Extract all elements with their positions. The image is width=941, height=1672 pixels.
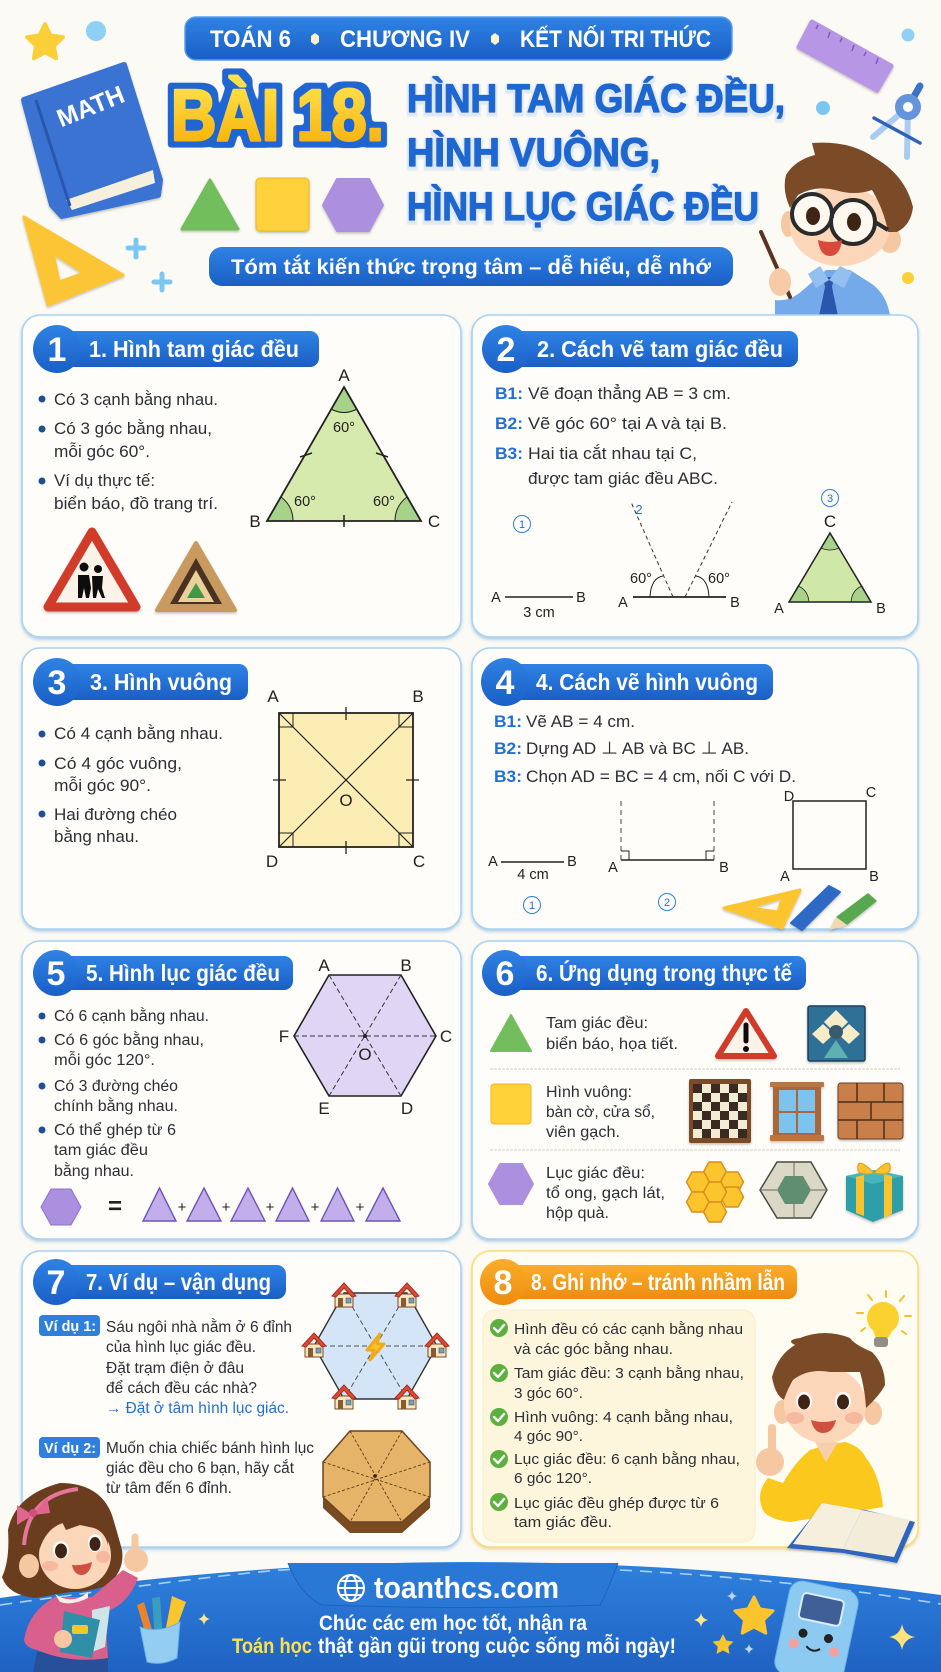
heading 6 bbox=[482, 950, 806, 996]
checklist: Hình vuông: 4 cạnh bằng nhau, bbox=[514, 1409, 733, 1426]
heading 6: 6. Ứng dụng trong thực tế bbox=[536, 959, 792, 986]
diagram step 3: C bbox=[824, 512, 836, 531]
diagram step 1: A bbox=[488, 854, 498, 870]
diagram step 1: 4 cm bbox=[517, 867, 549, 883]
diagram step 2: A bbox=[618, 595, 628, 611]
header bbox=[24, 17, 920, 316]
bullet list: Có 4 góc vuông, bbox=[54, 755, 182, 773]
square diagram ABCD: B bbox=[412, 687, 424, 706]
bullet list: Có 6 cạnh bằng nhau. bbox=[54, 1008, 209, 1025]
example 2: giác đều cho 6 bạn, hãy cắt bbox=[106, 1460, 295, 1477]
diagram step 1 bbox=[491, 516, 586, 621]
closing message: Chúc các em học tốt, nhận ra bbox=[319, 1612, 587, 1635]
bullet list bbox=[38, 390, 218, 513]
checklist: Lục giác đều: 6 cạnh bằng nhau, bbox=[514, 1451, 740, 1468]
icon: chess board bbox=[689, 1079, 751, 1143]
checklist: Lục giác đều ghép được từ 6 bbox=[514, 1495, 719, 1512]
bullet list: bằng nhau. bbox=[54, 1163, 134, 1180]
row: hexagon uses: tổ ong, gạch lát, bbox=[546, 1185, 665, 1202]
diagram step 2: 60° bbox=[630, 571, 652, 587]
icon: warning sign bbox=[718, 1011, 774, 1056]
panel 3: square bbox=[22, 648, 461, 929]
diagram step 3: B bbox=[869, 869, 879, 885]
icon: calculator bbox=[772, 1579, 861, 1672]
bullet list: Có 3 góc bằng nhau, bbox=[54, 419, 212, 438]
character: boy in yellow hoodie bbox=[756, 1333, 885, 1522]
icon: gift box bbox=[846, 1163, 903, 1222]
icon: math book: MATH bbox=[53, 81, 129, 133]
checklist: 6 góc 120°. bbox=[514, 1470, 592, 1487]
icon: school warning sign bbox=[48, 532, 136, 607]
diagram step 1: 1 bbox=[519, 519, 525, 531]
main title bbox=[407, 75, 785, 229]
steps: B3: bbox=[495, 445, 523, 463]
triangle diagram ABC: 60° bbox=[333, 420, 355, 436]
icon: honeycomb bbox=[686, 1162, 744, 1222]
checklist bbox=[483, 1310, 755, 1542]
square diagram ABCD: O bbox=[339, 791, 353, 810]
icon: ruler bbox=[799, 22, 891, 90]
bullet list: Có thể ghép từ 6 bbox=[54, 1122, 176, 1139]
panel 4: how to draw square bbox=[472, 648, 918, 930]
diagram step 1: B bbox=[576, 590, 586, 606]
heading 1: 1. Hình tam giác đều bbox=[89, 336, 299, 362]
diagram step 2 bbox=[618, 502, 740, 611]
steps: Vẽ góc 60° tại A và tại B. bbox=[528, 415, 727, 433]
diagram step 2: B bbox=[730, 595, 740, 611]
diagram step 1: 1 bbox=[529, 900, 535, 912]
heading 3: 3 bbox=[48, 664, 66, 702]
diagram step 3 bbox=[780, 785, 879, 885]
diagram step 3: D bbox=[784, 789, 794, 805]
decorative dots and plus signs bbox=[86, 21, 914, 290]
icon: globe bbox=[338, 1575, 364, 1601]
icon: compass bbox=[873, 86, 920, 157]
heading 7: 7. Ví dụ – vận dụng bbox=[86, 1269, 271, 1295]
example 1: để cách đều các nhà? bbox=[106, 1380, 257, 1397]
checklist: 4 góc 90°. bbox=[514, 1428, 583, 1445]
heading 3: 3. Hình vuông bbox=[90, 669, 232, 695]
triangle diagram ABC bbox=[249, 366, 440, 531]
bullet list: Ví dụ thực tế: bbox=[54, 472, 155, 490]
row: hexagon uses bbox=[489, 1162, 903, 1222]
icon: bricks bbox=[838, 1083, 903, 1139]
row: hexagon uses: hộp quà. bbox=[546, 1205, 609, 1222]
icon: open book bbox=[787, 1503, 915, 1563]
example 1: Đặt trạm điện ở đâu bbox=[106, 1360, 244, 1377]
hexagon equals six triangles: = bbox=[108, 1193, 122, 1220]
heading 7 bbox=[33, 1259, 286, 1305]
heading 4: 4 bbox=[496, 664, 515, 702]
hexagon diagram: O bbox=[358, 1045, 372, 1064]
example 1: → Đặt ở tâm hình lục giác. bbox=[106, 1400, 289, 1417]
heading 8: 8 bbox=[494, 1264, 512, 1302]
bullet list: Hai đường chéo bbox=[54, 806, 177, 824]
hexagon diagram: E bbox=[318, 1099, 330, 1118]
bullet list: mỗi góc 60°. bbox=[54, 442, 150, 461]
main title: HÌNH LỤC GIÁC ĐỀU bbox=[407, 183, 759, 229]
icon: wooden triangle ornament bbox=[157, 543, 235, 610]
heading 5 bbox=[33, 950, 293, 996]
steps: B2: bbox=[494, 740, 522, 758]
steps: Dựng AD ⊥ AB và BC ⊥ AB. bbox=[526, 740, 749, 758]
closing message: thật gần gũi trong cuộc sống mỗi ngày! bbox=[318, 1634, 676, 1658]
diagram step 2: 2 bbox=[635, 502, 643, 517]
diagram step 1: B bbox=[567, 854, 577, 870]
diagram step 1: 3 cm bbox=[523, 605, 555, 621]
subtitle pill bbox=[209, 247, 733, 286]
bullet list: biển báo, đồ trang trí. bbox=[54, 495, 218, 513]
row: square uses: Hình vuông: bbox=[546, 1084, 632, 1101]
triangle diagram ABC: A bbox=[338, 366, 350, 385]
diagram step 3: 3 bbox=[827, 493, 833, 505]
row: triangle uses: biển báo, họa tiết. bbox=[546, 1036, 678, 1053]
example 1: Sáu ngôi nhà nằm ở 6 đỉnh bbox=[106, 1319, 292, 1336]
steps: Chọn AD = BC = 4 cm, nối C với D. bbox=[526, 768, 796, 786]
diagram step 3: A bbox=[774, 601, 784, 617]
hexagon diagram: C bbox=[440, 1027, 452, 1046]
heading 3 bbox=[33, 658, 248, 706]
diagram step 3: C bbox=[866, 785, 876, 801]
heading 2: 2 bbox=[497, 331, 515, 369]
bullet list: bằng nhau. bbox=[54, 827, 139, 846]
bullet list: mỗi góc 120°. bbox=[54, 1052, 155, 1069]
closing message bbox=[232, 1612, 676, 1658]
steps: B3: bbox=[494, 768, 522, 786]
square diagram ABCD bbox=[266, 687, 425, 871]
diagram step 2 bbox=[608, 799, 729, 910]
hexagon equals six triangles: + bbox=[178, 1199, 187, 1216]
diagram step 1: A bbox=[491, 590, 501, 606]
heading 8: 8. Ghi nhớ – tránh nhầm lẫn bbox=[531, 1268, 785, 1295]
bullet list: chính bằng nhau. bbox=[54, 1098, 178, 1115]
example 2 bbox=[39, 1437, 314, 1497]
hexagon equals six triangles: + bbox=[222, 1199, 231, 1216]
bullet list bbox=[38, 724, 223, 846]
main title: HÌNH VUÔNG, bbox=[407, 129, 660, 175]
example 2: Ví dụ 2: bbox=[44, 1440, 96, 1457]
panel 5: regular hexagon bbox=[22, 941, 461, 1239]
hexagon with houses bbox=[302, 1283, 449, 1409]
bullet list: Có 4 cạnh bằng nhau. bbox=[54, 724, 223, 743]
heading 1 bbox=[33, 325, 319, 373]
triangle diagram ABC: 60° bbox=[294, 494, 316, 510]
hexagon equals six triangles bbox=[41, 1188, 400, 1225]
steps bbox=[494, 713, 796, 786]
heading 8 bbox=[480, 1259, 797, 1305]
square diagram ABCD: D bbox=[266, 852, 278, 871]
icon: star bbox=[27, 24, 63, 58]
bullet list: Có 3 đường chéo bbox=[54, 1078, 178, 1095]
row: hexagon uses: Lục giác đều: bbox=[546, 1165, 645, 1182]
heading 2: 2. Cách vẽ tam giác đều bbox=[537, 336, 783, 362]
character: girl with book bbox=[2, 1483, 148, 1672]
diagram step 3 bbox=[774, 490, 886, 617]
icon: pencil cup bbox=[137, 1596, 186, 1663]
steps: Vẽ AB = 4 cm. bbox=[526, 713, 635, 731]
example 1: của hình lục giác đều. bbox=[106, 1339, 256, 1356]
example 2: Muốn chia chiếc bánh hình lục bbox=[106, 1440, 314, 1457]
steps: B1: bbox=[495, 385, 523, 403]
panel 2: how to draw equilateral triangle bbox=[472, 315, 918, 637]
triangle diagram ABC: 60° bbox=[373, 494, 395, 510]
heading 1: 1 bbox=[48, 331, 66, 369]
heading 7: 7 bbox=[47, 1264, 65, 1302]
diagram step 3: B bbox=[876, 601, 886, 617]
bullet list bbox=[38, 1008, 209, 1180]
bullet list: Có 6 góc bằng nhau, bbox=[54, 1032, 204, 1049]
square diagram ABCD: C bbox=[413, 852, 425, 871]
panel 1: equilateral triangle bbox=[22, 315, 461, 637]
top pill: course info: KẾT NỐI TRI THỨC bbox=[520, 25, 711, 53]
checklist: và các góc bằng nhau. bbox=[514, 1341, 673, 1358]
heading 4 bbox=[481, 658, 773, 706]
checklist: tam giác đều. bbox=[514, 1514, 612, 1531]
hexagon equals six triangles: + bbox=[311, 1199, 320, 1216]
checklist: Hình đều có các cạnh bằng nhau bbox=[514, 1321, 743, 1338]
example 1: Ví dụ 1: bbox=[44, 1318, 96, 1335]
steps: B2: bbox=[495, 415, 523, 433]
lesson badge: BÀI 18.: BÀI 18. bbox=[171, 76, 384, 156]
heading 2 bbox=[482, 325, 798, 373]
top pill: course info: TOÁN 6 bbox=[210, 25, 291, 53]
diagram step 1 bbox=[488, 854, 577, 914]
main title: HÌNH TAM GIÁC ĐỀU, bbox=[407, 75, 785, 121]
square diagram ABCD: A bbox=[267, 687, 279, 706]
heading 4: 4. Cách vẽ hình vuông bbox=[536, 669, 758, 695]
row: triangle uses: Tam giác đều: bbox=[546, 1015, 648, 1032]
hexagon equals six triangles: + bbox=[266, 1199, 275, 1216]
checklist: 3 góc 60°. bbox=[514, 1385, 583, 1402]
panel 8: remember bbox=[472, 1251, 918, 1563]
diagram step 2: 60° bbox=[708, 571, 730, 587]
hexagon equals six triangles: + bbox=[356, 1199, 365, 1216]
panel 6: real-life applications bbox=[472, 941, 918, 1239]
steps: được tam giác đều ABC. bbox=[528, 470, 718, 488]
row: square uses bbox=[491, 1079, 903, 1143]
steps: B1: bbox=[494, 713, 522, 731]
icon: window bbox=[770, 1082, 824, 1141]
steps bbox=[495, 384, 731, 488]
panel 7: examples bbox=[22, 1251, 461, 1547]
icon: tile pattern bbox=[808, 1006, 865, 1061]
bullet list: tam giác đều bbox=[54, 1142, 148, 1159]
row: triangle uses bbox=[491, 1006, 865, 1061]
hexagon diagram: A bbox=[318, 956, 330, 975]
closing message: Toán học bbox=[232, 1635, 312, 1658]
triangle diagram ABC: C bbox=[428, 512, 440, 531]
heading 5: 5 bbox=[47, 955, 65, 993]
icon: light bulb bbox=[857, 1291, 911, 1347]
hexagon diagram: D bbox=[401, 1099, 413, 1118]
diagram step 3: A bbox=[780, 869, 790, 885]
steps: Hai tia cắt nhau tại C, bbox=[528, 444, 697, 463]
example 2: từ tâm đến 6 đỉnh. bbox=[106, 1480, 232, 1497]
heading 5: 5. Hình lục giác đều bbox=[86, 960, 280, 986]
icon: three shapes bbox=[182, 178, 383, 231]
icon: drawing tools bbox=[724, 886, 877, 930]
character: teacher boy bbox=[761, 143, 913, 316]
row: square uses: viên gạch. bbox=[546, 1124, 620, 1141]
checklist: Tam giác đều: 3 cạnh bằng nhau, bbox=[514, 1365, 744, 1382]
footer band bbox=[0, 1562, 941, 1672]
icon: math book bbox=[24, 65, 160, 216]
hexagon diagram: F bbox=[279, 1027, 289, 1046]
icon: sparkles and stars bbox=[198, 1591, 915, 1654]
bullet list: mỗi góc 90°. bbox=[54, 776, 151, 795]
icon: set square bbox=[24, 217, 123, 305]
icon: hexagonal cake bbox=[323, 1431, 430, 1533]
top pill: course info bbox=[185, 17, 732, 60]
hexagon diagram bbox=[279, 956, 452, 1118]
row: square uses: bàn cờ, cửa sổ, bbox=[546, 1104, 655, 1121]
heading 6: 6 bbox=[496, 955, 514, 993]
hexagon diagram: B bbox=[400, 956, 412, 975]
diagram step 2: 2 bbox=[664, 897, 670, 909]
diagram step 2: A bbox=[608, 860, 618, 876]
subtitle pill: Tóm tắt kiến thức trọng tâm – dễ hiểu, dễ nhớ bbox=[231, 255, 711, 279]
triangle diagram ABC: B bbox=[249, 512, 261, 531]
steps: Vẽ đoạn thẳng AB = 3 cm. bbox=[528, 384, 731, 403]
bullet list: Có 3 cạnh bằng nhau. bbox=[54, 390, 218, 409]
icon: hexagon tile bbox=[760, 1162, 827, 1218]
top pill: course info: CHƯƠNG IV bbox=[340, 26, 470, 53]
diagram step 2: B bbox=[719, 860, 729, 876]
example 1 bbox=[39, 1315, 292, 1417]
website name: toanthcs.com bbox=[374, 1570, 559, 1605]
